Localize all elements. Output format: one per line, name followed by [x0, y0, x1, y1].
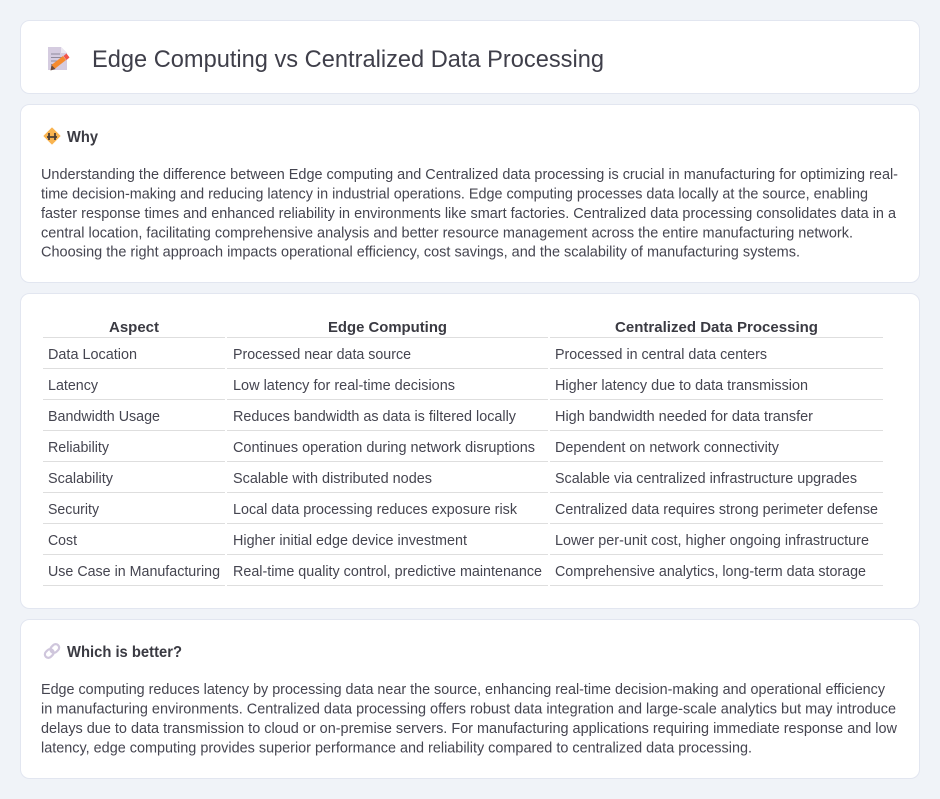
table row: security: Security	[48, 502, 100, 518]
text block: verdict: Edge computing reduces latency by processing data near the source, enhancing real-time decision-making and operational efficiency	[41, 682, 886, 698]
panel: title header	[20, 20, 920, 94]
table row: bandwidth usage: Bandwidth Usage	[48, 409, 160, 425]
table row: data location: Processed in central data centers	[555, 347, 767, 363]
text block: why explanation: central location, facilitating comprehensive analysis and better resource management across the entire manufacturing network.	[41, 225, 853, 241]
table row: reliability	[43, 440, 883, 462]
table row: scalability: Scalable with distributed nodes	[233, 471, 432, 487]
text block: why explanation: Choosing the right approach impacts operational efficiency, cost savings, and the scalability of manufacturing systems.	[41, 245, 800, 261]
table row: reliability: Continues operation during network disruptions	[233, 440, 535, 456]
table row: bandwidth usage: Reduces bandwidth as data is filtered locally	[233, 409, 517, 425]
text block: verdict	[41, 682, 898, 756]
table header row: Centralized Data Processing	[615, 319, 818, 336]
text block: verdict: in manufacturing environments. Centralized data processing offers robust data integration and large-scale analytics but may introduce	[41, 702, 896, 718]
table row: reliability: Reliability	[48, 440, 110, 456]
text block: why explanation	[41, 167, 898, 261]
text block: why explanation: Understanding the difference between Edge computing and Centralized data processing is crucial in manufacturing for optimizing real-	[41, 167, 898, 183]
panel: why	[20, 104, 920, 282]
table row: bandwidth usage: High bandwidth needed for data transfer	[555, 409, 813, 425]
panel: which is better	[20, 620, 920, 778]
table row: cost: Cost	[48, 533, 77, 549]
table row: latency: Higher latency due to data transmission	[555, 378, 808, 394]
icon: document with pencil	[48, 47, 70, 70]
table row: data location: Processed near data source	[233, 347, 411, 363]
table row: cost	[43, 533, 883, 554]
table row: use case in manufacturing	[43, 564, 883, 586]
table row: security: Local data processing reduces exposure risk	[233, 502, 518, 518]
table row: security: Centralized data requires strong perimeter defense	[555, 502, 878, 518]
table header row: Aspect	[109, 319, 159, 336]
table row: scalability	[43, 471, 883, 492]
text block: verdict: delays due to data transmission to cloud or on-premise servers. For manufacturing applications requiring immediate response and low	[41, 721, 898, 737]
text block: verdict: latency, edge computing provides superior performance and reliability compared to centralized data processing.	[41, 740, 752, 756]
table row: scalability: Scalability	[48, 471, 114, 487]
table header row	[43, 319, 883, 338]
text block: why explanation: time decision-making and reducing latency in industrial operations. Edge computing processes data locally at the source, enabling	[41, 186, 868, 202]
table row: latency: Low latency for real-time decisions	[233, 378, 455, 394]
table row: use case in manufacturing: Comprehensive analytics, long-term data storage	[555, 564, 866, 580]
table header row: Edge Computing	[328, 319, 447, 336]
table row: use case in manufacturing: Real-time quality control, predictive maintenance	[233, 564, 542, 580]
icon: chain link	[43, 643, 61, 659]
text block: why explanation: faster response times and enhanced reliability in environments like smart factories. Centralized data processing consolidates data in a	[41, 206, 896, 222]
title: Edge Computing vs Centralized Data Processing	[92, 46, 604, 73]
table row: scalability: Scalable via centralized infrastructure upgrades	[555, 471, 857, 487]
table row: use case in manufacturing: Use Case in Manufacturing	[48, 564, 220, 580]
table row: security	[43, 502, 883, 524]
table row: data location: Data Location	[48, 347, 137, 363]
table row: reliability: Dependent on network connectivity	[555, 440, 780, 456]
table row: cost: Lower per-unit cost, higher ongoing infrastructure	[555, 533, 869, 549]
table row: data location	[43, 347, 883, 368]
table row: latency	[43, 378, 883, 400]
icon: orange road sign diamond	[44, 128, 60, 144]
panel: comparison table	[20, 294, 920, 608]
heading: why: Why	[67, 129, 98, 146]
heading: which is better: Which is better?	[67, 644, 182, 661]
table row: cost: Higher initial edge device investment	[233, 533, 467, 549]
table row: latency: Latency	[48, 378, 99, 394]
table row: bandwidth usage	[43, 409, 883, 430]
